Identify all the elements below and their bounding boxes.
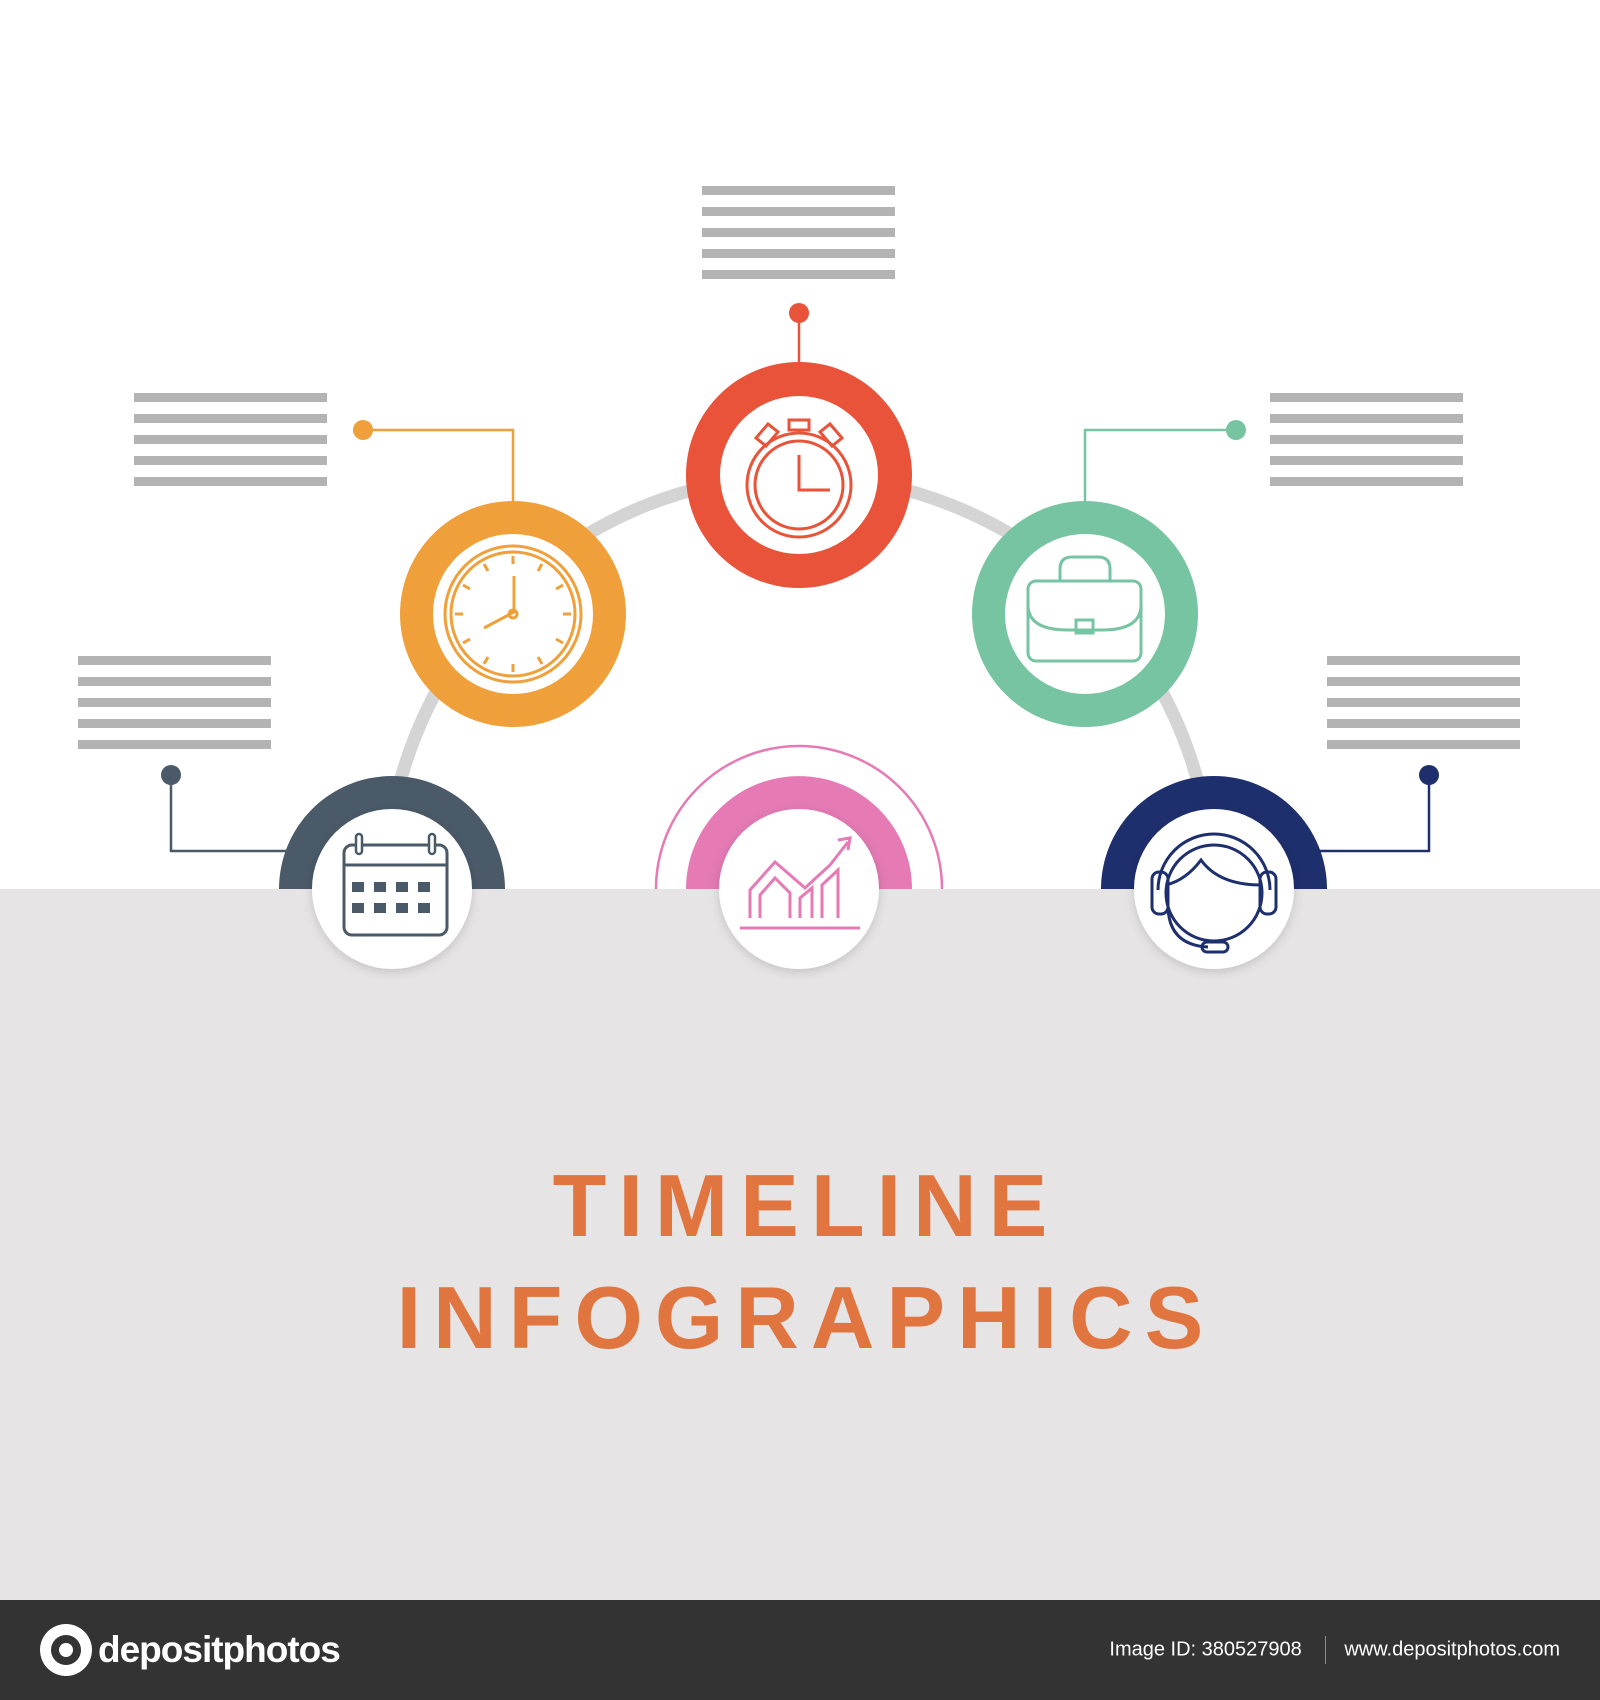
logo: depositphotos	[98, 1629, 340, 1670]
connector: green	[1085, 420, 1246, 505]
icon: growth chart	[740, 838, 860, 928]
title	[397, 1156, 1215, 1367]
connector: orange	[353, 420, 513, 505]
footer bar	[0, 1600, 1600, 1700]
connector: red	[789, 303, 809, 365]
connector: slate	[161, 765, 290, 851]
text lines: lower left	[78, 656, 271, 749]
text lines: upper left	[134, 393, 327, 486]
step: pink growth chart	[656, 746, 942, 969]
step: green briefcase	[972, 501, 1198, 727]
text lines: top	[702, 186, 895, 279]
logo	[40, 1624, 340, 1676]
icon: calendar	[344, 834, 447, 935]
image id: Image ID: 380527908 www.depositphotos.com	[1109, 1638, 1560, 1660]
connector: navy	[1310, 765, 1439, 851]
step: navy headset	[1101, 776, 1327, 969]
text lines: lower right	[1327, 656, 1520, 749]
icon: stopwatch	[747, 420, 851, 537]
title: TIMELINE	[553, 1156, 1059, 1255]
icon: clock	[445, 546, 581, 682]
step: slate calendar	[279, 776, 505, 969]
icon: briefcase	[1028, 557, 1141, 661]
step: orange clock	[400, 501, 626, 727]
bottom gray panel	[0, 889, 1600, 1600]
arc track	[386, 476, 1212, 889]
text lines: upper right	[1270, 393, 1463, 486]
step: red stopwatch	[686, 362, 912, 588]
icon: headset	[1152, 834, 1276, 952]
title: INFOGRAPHICS	[397, 1268, 1215, 1367]
